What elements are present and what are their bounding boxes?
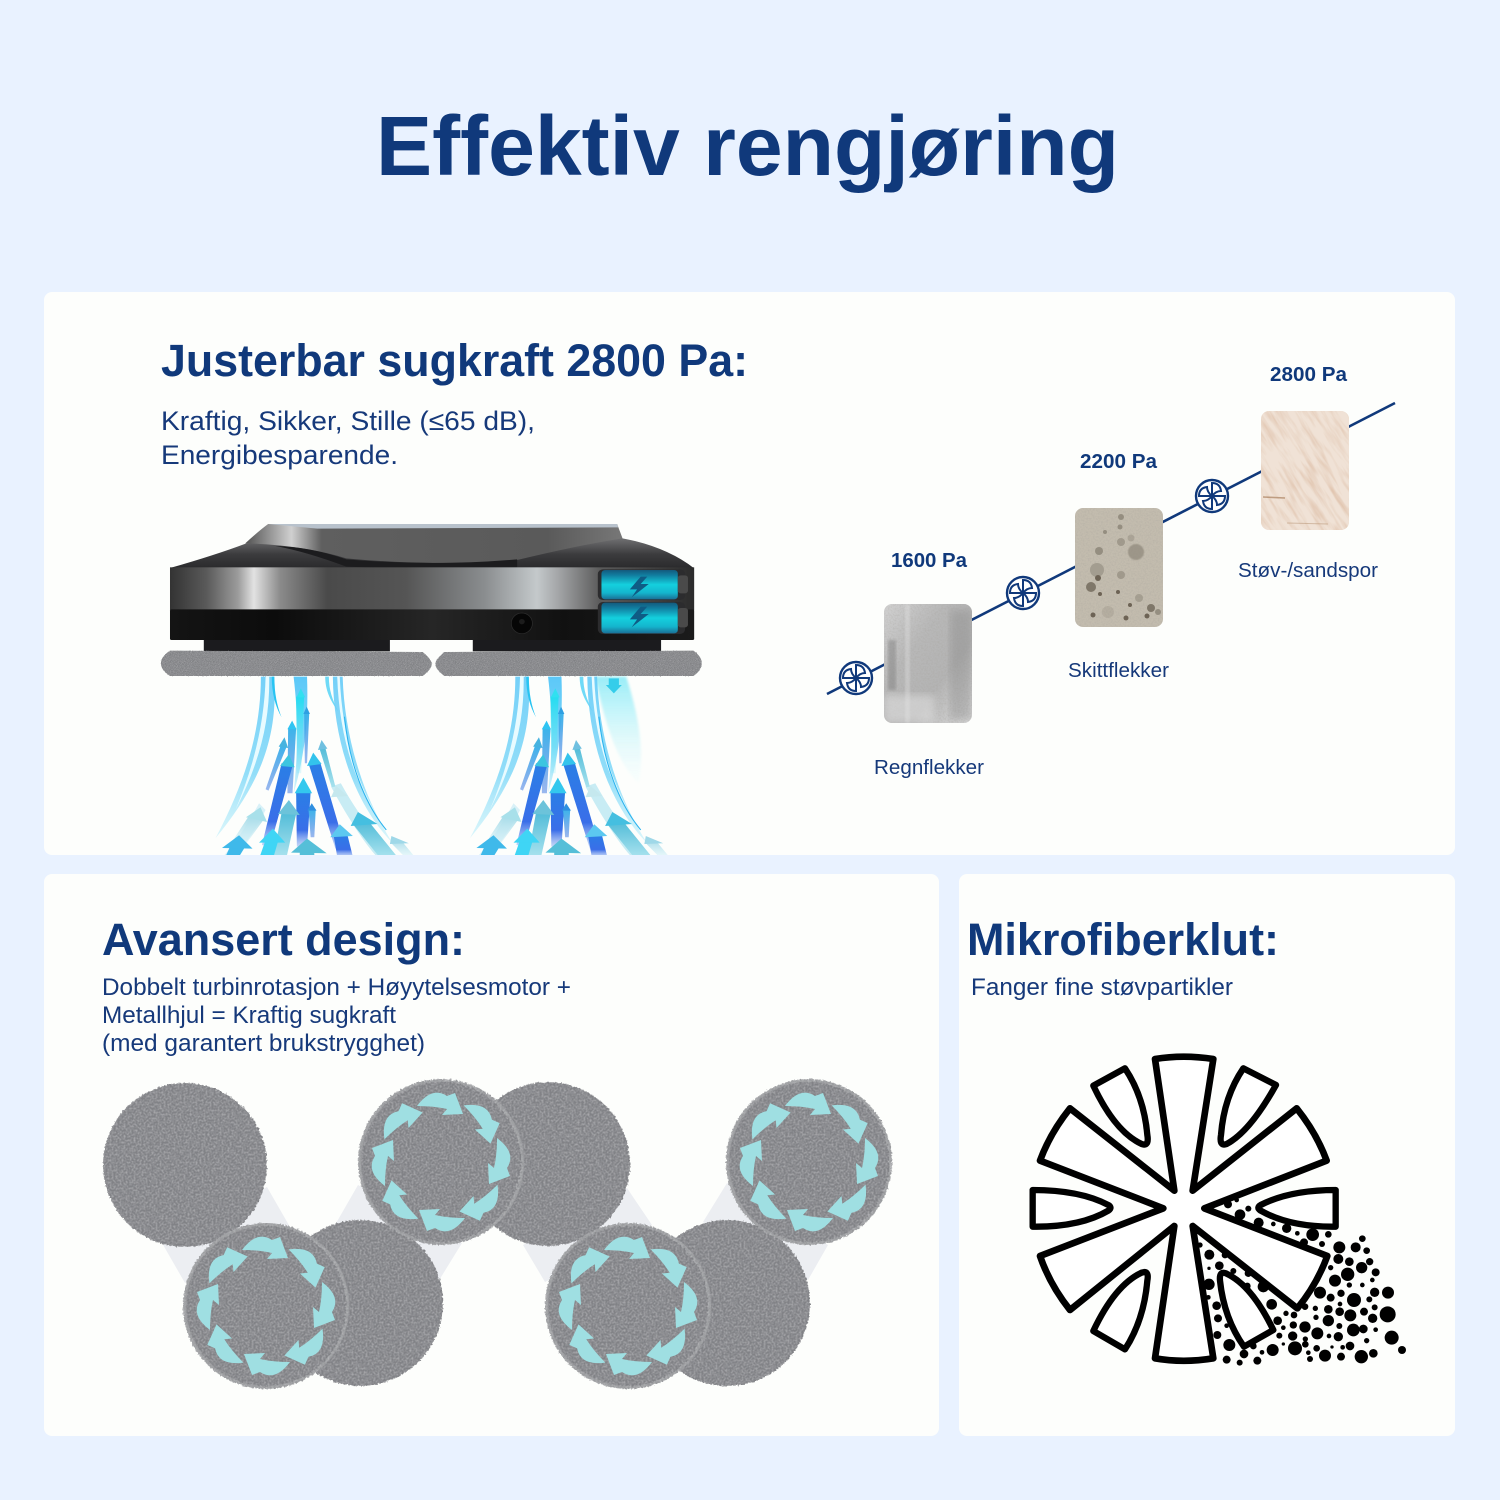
title: Effektiv rengjøring: [376, 99, 1119, 193]
suction scale line: [827, 403, 1395, 694]
label: Skittflekker: Skittflekker: [1068, 659, 1169, 682]
text block: suction features: [161, 406, 535, 470]
batteries: [598, 569, 688, 634]
button: [511, 613, 532, 634]
icon: fan 2: [1007, 577, 1039, 609]
label: 2800 Pa: 2800 Pa: [1270, 364, 1348, 386]
text block: design description: Dobbelt turbinrotasjon + Høyytelsesmotor +: [102, 974, 571, 1001]
label: Regnflekker: Regnflekker: [874, 756, 984, 779]
mop pads side view: [161, 651, 702, 676]
stain: dust and sand: [1239, 367, 1378, 581]
panel: microfiber cloth: [959, 874, 1455, 1436]
label: Støv-/sandspor: Støv-/sandspor: [1238, 559, 1378, 582]
mop pads plain: [103, 1082, 810, 1386]
panel: adjustable suction: [44, 292, 1468, 857]
label: 1600 Pa: 1600 Pa: [891, 550, 968, 572]
body top shell: [170, 538, 694, 568]
black band: [170, 609, 694, 640]
heading: microfiber: Mikrofiberklut:: [967, 914, 1279, 965]
heading: suction: Justerbar sugkraft 2800 Pa:: [161, 335, 748, 386]
text block: suction features: Energibesparende.: [161, 440, 398, 470]
label: 2200 Pa: 2200 Pa: [1080, 451, 1158, 473]
text block: design description: Metallhjul = Kraftig sugkraft: [102, 1002, 396, 1029]
heading: design: Avansert design:: [102, 914, 465, 965]
text block: suction features: Kraftig, Sikker, Stille (≤65 dB),: [161, 406, 535, 436]
airflow illustration: [215, 677, 669, 857]
mop pad connectors: [162, 1183, 828, 1283]
text block: design description: (med garantert brukstrygghet): [102, 1030, 425, 1057]
text block: design description: [102, 974, 571, 1057]
icon: fan 1: [840, 662, 872, 694]
metal band: [170, 567, 694, 610]
mop pads with rotation arrows: [183, 1079, 892, 1389]
text block: microfiber description: Fanger fine støvpartikler: [971, 974, 1233, 1001]
icon: fan 3: [1196, 480, 1228, 512]
panel: advanced design: [44, 874, 939, 1436]
feet: [204, 639, 390, 651]
lid: [245, 524, 623, 563]
robot cleaner: [161, 524, 702, 676]
stain: rain spots: [874, 550, 984, 779]
stain: dirt spots: [1068, 451, 1169, 682]
icon: microfiber wheel with dust: [1033, 1057, 1406, 1366]
